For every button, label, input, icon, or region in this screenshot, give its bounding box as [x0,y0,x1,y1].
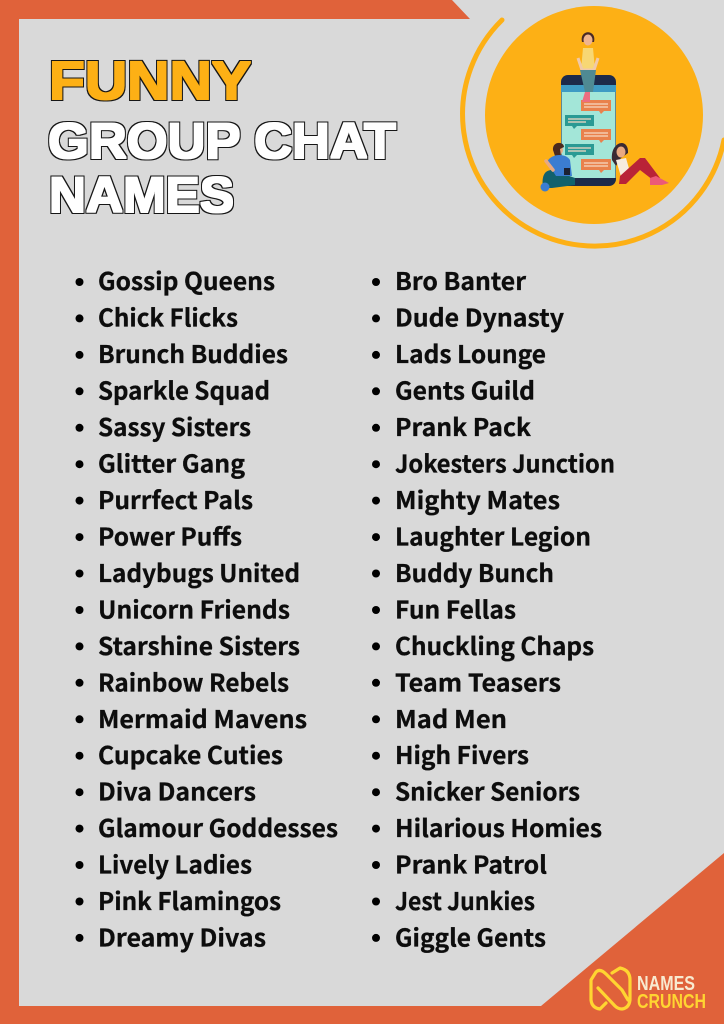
list: left column: Chick Flicks [98,300,238,334]
list: left column: Sassy Sisters [98,409,251,444]
list: right column: Prank Pack [395,409,531,444]
logo text: Crunch: CRUNCH [637,991,706,1013]
list: right column: Snicker Seniors [395,774,580,809]
panel: orange bottom right corner [19,853,724,1024]
list: right column: Jokesters Junction [395,446,615,481]
panel: orange top and left frame [0,0,470,1024]
list: left column: Starshine Sisters [98,628,300,663]
list: left column: Glitter Gang [98,446,245,481]
list: right column: Buddy Bunch [395,555,554,590]
icon: woman reclining on right [612,143,669,185]
icon: woman sitting on phone [578,32,598,102]
list: right column: Prank Patrol [395,846,547,882]
title line: Names: NAMES [49,167,234,223]
list: left column: Gossip Queens [98,263,275,298]
list: right column: Jest Junkies [395,883,535,918]
list: right column: Team Teasers [395,664,561,699]
icon: yellow circle with ring [463,6,724,246]
icon: logo N mark [591,968,630,1009]
list: left column: Ladybugs United [98,555,300,590]
list: left column: Sparkle Squad [98,372,270,408]
list: right column: Mad Men [395,701,507,736]
list: right column: High Fivers [395,737,529,772]
list: right column: Laughter Legion [395,518,591,554]
list: right column: Fun Fellas [395,592,516,626]
logo text: Names: NAMES [637,973,695,995]
logo: Names Crunch [591,968,706,1013]
list: left column: Brunch Buddies [98,336,288,371]
list: right column: Gents Guild [395,372,535,408]
list: right column: Giggle Gents [395,919,546,954]
list: right column: Hilarious Homies [395,810,602,845]
list: right column: Dude Dynasty [395,300,564,334]
list: left column: Lively Ladies [98,846,252,882]
list: right column: Chuckling Chaps [395,628,594,663]
icon: phone with chat bubbles [561,75,616,186]
list: right column: Lads Lounge [395,336,546,371]
icon: man sitting on left [540,143,575,192]
list: left column: Purrfect Pals [98,482,253,517]
list: right column: Mighty Mates [395,482,560,517]
title [48,51,396,223]
list: right column: Bro Banter [395,263,526,298]
title line: Group Chat: GROUP CHAT [48,113,396,169]
list: left column: Mermaid Mavens [98,701,307,736]
list: left column: Cupcake Cuties [98,737,283,772]
list: right column [372,263,615,954]
list: left column: Pink Flamingos [98,883,281,918]
list: left column: Dreamy Divas [98,919,266,954]
list: left column: Glamour Goddesses [98,810,338,845]
title line: Funny: FUNNY [49,51,251,111]
list: left column [76,263,338,954]
list: left column: Diva Dancers [98,774,256,809]
list: left column: Power Puffs [98,518,242,554]
list: left column: Unicorn Friends [98,592,290,626]
list: left column: Rainbow Rebels [98,664,289,699]
